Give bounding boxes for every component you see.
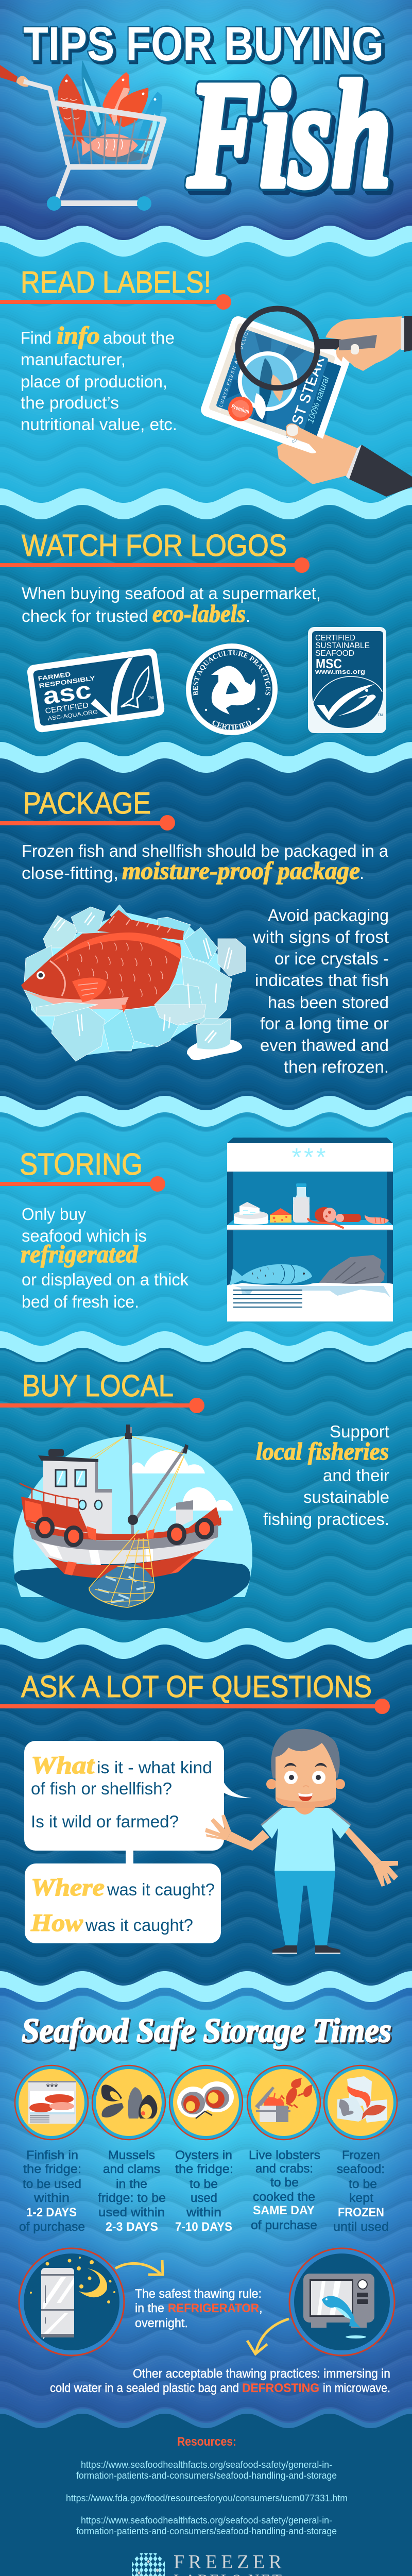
- column: lobsters: of purchase: [251, 2218, 317, 2232]
- pink fish: [81, 134, 138, 157]
- column: finfish: 1-2 DAYS: [26, 2206, 77, 2219]
- column: mussels: [98, 2148, 166, 2234]
- logo: msc: TM: [377, 714, 383, 717]
- column: mussels: used within: [98, 2206, 165, 2219]
- speech bubble: where and how: was it caught?: [85, 1916, 193, 1935]
- icon: shopping cart with fish: [0, 60, 164, 211]
- column: oysters: to be: [190, 2177, 218, 2191]
- icon: mussels: [101, 2084, 157, 2119]
- body text: nutritional value, etc.: [21, 415, 177, 434]
- column: lobsters: and crabs:: [255, 2162, 313, 2176]
- body text: the product’s: [21, 393, 119, 412]
- divider waves: [0, 223, 412, 2010]
- column: finfish: the fridge:: [23, 2162, 81, 2176]
- speech bubble: where and how: was it caught?: [107, 1880, 215, 1899]
- arms: [226, 1830, 269, 1851]
- icon: freezer: [28, 2081, 76, 2124]
- bubble connector: [126, 1850, 133, 1865]
- body text: place of production,: [21, 372, 167, 391]
- body text: When buying seafood at a supermarket,: [22, 584, 321, 603]
- blue fish: [230, 1264, 312, 1285]
- column: lobsters: SAME DAY: [253, 2204, 315, 2217]
- column: mussels: fridge: to be: [98, 2191, 166, 2205]
- icon: fridge at night: [19, 2248, 124, 2355]
- white ice bed: [227, 1283, 393, 1321]
- illustration: fridge display: ***: [291, 1144, 329, 1171]
- column: frozen: to be: [349, 2177, 377, 2191]
- column: finfish: of purchase: [19, 2220, 85, 2234]
- column: oysters: used: [191, 2191, 217, 2205]
- body text: fishing practices.: [263, 1510, 389, 1529]
- column: oysters: [175, 2148, 233, 2234]
- panel: storing: [0, 1138, 393, 1321]
- title: seafood safe storage times: Seafood Safe Storage Times: [23, 2013, 393, 2051]
- body text: close-fitting,: [22, 863, 118, 883]
- column: lobsters: to be: [270, 2176, 299, 2190]
- logo: asc: CERTIFIED: [45, 701, 89, 716]
- illustration: hands, label and magnifier: JUST STEAK: [282, 353, 328, 445]
- heading rule: [0, 294, 231, 310]
- label stripes: [233, 1290, 302, 1308]
- column: oysters: 7-10 DAYS: [175, 2220, 232, 2234]
- logo: msc: SUSTAINABLE: [315, 641, 370, 650]
- speech bubble: where and how: How: [30, 1909, 83, 1937]
- body text: eco-labels: [152, 600, 246, 628]
- column: lobsters: cooked the: [253, 2190, 315, 2204]
- logo: msc: [308, 627, 386, 733]
- speech bubble: what: Is it wild or farmed?: [31, 1812, 179, 1831]
- gray fish on ice: [318, 1255, 385, 1284]
- railing: [20, 1483, 79, 1510]
- resource links: https://www.fda.gov/food/resourcesforyou/consumers/ucm077331.htm: [66, 2493, 348, 2503]
- body text: right column: for a long time or: [260, 1014, 389, 1033]
- logo: asc: FARMED: [38, 671, 72, 682]
- column: finfish: Finfish in: [26, 2148, 78, 2162]
- body text: right column: indicates that fish: [255, 971, 389, 990]
- heading: watch for logos: WATCH FOR LOGOS: [22, 529, 287, 563]
- logo: best aquaculture practices: CERTIFIED: [212, 720, 251, 730]
- heading: resources: Resources:: [177, 2435, 236, 2449]
- icon: microwave with fish: [289, 2248, 394, 2355]
- shoes: [272, 1945, 340, 1953]
- column: finfish: within: [33, 2191, 70, 2205]
- column: mussels: Mussels: [108, 2148, 155, 2162]
- body text: right column: even thawed and: [260, 1036, 389, 1055]
- icon: pot with lobsters: [255, 2078, 313, 2122]
- text: safest thawing rule: in the: [135, 2301, 164, 2315]
- illustration: hands, label and magnifier: Premium: [231, 403, 250, 415]
- body text: refrigerated: [21, 1241, 139, 1268]
- shrimp: [365, 1215, 389, 1224]
- body text: about the: [103, 328, 175, 347]
- heading: ask a lot of questions: ASK A LOT OF QUESTIONS: [21, 1670, 372, 1704]
- illustration: hands, label and magnifier: [199, 309, 412, 497]
- column: lobsters: [249, 2148, 320, 2232]
- resource links: [66, 2460, 348, 2536]
- text: other thawing practices: DEFROSTING: [242, 2381, 319, 2395]
- panel: ask a lot of questions: [0, 1670, 398, 1954]
- body text: manufacturer,: [21, 350, 126, 369]
- upper hull: [21, 1497, 89, 1533]
- illustration: fridge display: [227, 1138, 393, 1321]
- illustration: hands, label and magnifier: 100% natural: [305, 375, 331, 425]
- small melting ice cube: [187, 1040, 242, 1060]
- heading rule: [0, 557, 310, 573]
- body text: right column: [252, 906, 389, 1076]
- resource links: https://www.seafoodhealthfacts.org/seafood-safety/general-in-: [81, 2515, 332, 2526]
- logo: asc: TM: [148, 695, 154, 701]
- dark water: [14, 1557, 250, 1620]
- logo: asc: ASC-AQUA.ORG: [47, 709, 98, 722]
- logo: best aquaculture practices: BEST AQUACULTURE PRACTICES: [193, 650, 271, 696]
- body text: seafood which is: [22, 1226, 147, 1245]
- column: oysters: within: [186, 2206, 221, 2219]
- text: safest thawing rule: ,: [259, 2301, 263, 2315]
- text: safest thawing rule: REFRIGERATOR: [168, 2301, 259, 2315]
- body text: [22, 841, 389, 885]
- text: other thawing practices: [50, 2367, 390, 2395]
- text: safest thawing rule: [135, 2287, 263, 2330]
- logo: msc: CERTIFIED: [315, 634, 355, 642]
- ice cubes in front: [36, 984, 206, 1061]
- dark fish behind: [93, 147, 149, 162]
- body text: and their: [323, 1466, 389, 1485]
- body text: .: [246, 606, 250, 625]
- body text: [21, 1205, 188, 1311]
- cart frame: [24, 81, 164, 200]
- red fish: [117, 88, 148, 127]
- logo: freezer labels: [132, 2551, 282, 2576]
- body text: sustainable: [303, 1487, 389, 1506]
- stern tower: [176, 1503, 193, 1528]
- speech bubble: what: What: [31, 1752, 95, 1779]
- logo: asc: asc: [41, 676, 93, 709]
- column: frozen: until used: [333, 2220, 389, 2234]
- column: frozen: seafood:: [337, 2162, 385, 2176]
- column: frozen: [333, 2148, 389, 2234]
- column: finfish: to be used: [23, 2177, 81, 2191]
- blue fish: [134, 92, 162, 155]
- trousers: [274, 1871, 335, 1945]
- title: seafood safe storage times: Seafood Safe Storage Times: [22, 2012, 391, 2049]
- milk bottle: [293, 1187, 310, 1223]
- orange salmon: [102, 72, 130, 126]
- body text: or displayed on a thick: [22, 1270, 188, 1289]
- speech bubble: what: [24, 1741, 252, 1851]
- column: oysters: the fridge:: [175, 2162, 233, 2176]
- column: frozen: kept: [349, 2191, 373, 2205]
- body text: Frozen fish and shellfish should be packaged in a: [22, 841, 389, 860]
- column: lobsters: Live lobsters: [249, 2148, 320, 2162]
- red fish: [58, 74, 87, 149]
- body text: check for trusted: [22, 606, 148, 625]
- panel: package: [0, 786, 389, 1076]
- cabin: [43, 1460, 112, 1540]
- logo: msc: MSC: [316, 656, 342, 671]
- body text: [21, 322, 177, 434]
- panel: buy local: [0, 1369, 389, 1675]
- body text: Find: [21, 328, 52, 347]
- logo: asc: RESPONSIBLY: [39, 674, 96, 689]
- body text: Only buy: [22, 1205, 86, 1224]
- body text: info: [57, 322, 100, 349]
- speech bubble: where and how: [25, 1863, 221, 1943]
- logo: msc: SEAFOOD: [315, 649, 354, 658]
- resource links: formation-patients-and-consumers/seafood-handling-and-storage: [76, 2526, 337, 2536]
- illustration: fish on ice: [21, 905, 246, 1061]
- hull bands: [46, 1548, 206, 1579]
- panel: header: [0, 17, 395, 223]
- cart wires: [64, 107, 152, 165]
- column: mussels: in the: [116, 2177, 147, 2191]
- logo: asc: [26, 648, 165, 733]
- panel: seafood safe storage times: [15, 2012, 397, 2395]
- logo: freezer labels: FREEZER: [174, 2551, 282, 2573]
- icon: freezer: ***: [46, 2082, 58, 2093]
- panel: footer: [0, 2409, 412, 2576]
- text: other thawing practices: in microwave.: [323, 2381, 390, 2395]
- text: other thawing practices: Other acceptable thawing practices: immersing in: [133, 2367, 390, 2381]
- icon circle backgrounds: [15, 2065, 397, 2140]
- text: safest thawing rule: The safest thawing rule:: [135, 2287, 262, 2301]
- resource links: formation-patients-and-consumers/seafood-handling-and-storage: [76, 2470, 337, 2481]
- icon: oysters: [177, 2081, 234, 2119]
- heading rule: [0, 815, 175, 831]
- column: mussels: 2-3 DAYS: [106, 2220, 158, 2234]
- blue pike: [81, 60, 105, 139]
- body text: right column: with signs of frost: [252, 927, 389, 946]
- fish: [97, 910, 184, 940]
- mast and boom: [130, 1427, 133, 1548]
- speech bubble: what: is it - what kind: [97, 1758, 212, 1777]
- heading rule: [0, 1176, 165, 1192]
- body text: right column: has been stored: [268, 993, 389, 1012]
- panel: read labels: [0, 265, 412, 497]
- text: other thawing practices: cold water in a sealed plastic bag and: [50, 2381, 239, 2395]
- body text: moisture-proof package: [122, 857, 360, 885]
- heading rule: [0, 1699, 390, 1714]
- heading: storing: STORING: [20, 1147, 143, 1181]
- illustration: fishing boat: [13, 1425, 252, 1675]
- panel: watch for logos: [0, 529, 386, 735]
- body text: Support: [330, 1422, 389, 1441]
- logo: best aquaculture practices: [186, 643, 278, 735]
- icon: frozen seafood in ice: [337, 2076, 387, 2123]
- body text: [22, 584, 321, 628]
- column text: [19, 2148, 389, 2234]
- column: finfish: [19, 2148, 85, 2234]
- heading: package: PACKAGE: [23, 786, 151, 820]
- body text: .: [359, 863, 364, 883]
- heading: buy local: BUY LOCAL: [22, 1369, 174, 1403]
- speech bubble: where and how: Where: [31, 1874, 105, 1901]
- column: oysters: Oysters in: [175, 2148, 232, 2162]
- body text: right column: then refrozen.: [284, 1057, 389, 1076]
- arrow: microwave to text: [247, 2319, 289, 2354]
- shirt: [262, 1808, 350, 1871]
- yellow cheese: [270, 1215, 291, 1223]
- illustration: man: [205, 1729, 398, 1954]
- body text: bed of fresh ice.: [22, 1292, 139, 1311]
- salami and sausages: [315, 1207, 334, 1223]
- column: frozen: FROZEN: [338, 2206, 384, 2219]
- speech bubble: what: of fish or shellfish?: [31, 1779, 172, 1798]
- logo: msc: www.msc.org: [315, 668, 365, 675]
- heading: read labels: READ LABELS!: [21, 265, 211, 299]
- body text: right column: Avoid packaging: [268, 906, 389, 925]
- heading rule: [0, 1398, 204, 1413]
- body text: local fisheries: [256, 1438, 389, 1465]
- text: safest thawing rule: overnight.: [135, 2316, 188, 2330]
- body text: [256, 1422, 389, 1529]
- column: frozen: Frozen: [342, 2148, 380, 2162]
- cheese wheel: [234, 1215, 268, 1223]
- resource links: https://www.seafoodhealthfacts.org/seafood-safety/general-in-: [81, 2460, 332, 2470]
- illustration: hands, label and magnifier: ALWAYS FRESH AND DELICIOUS: [217, 316, 254, 412]
- column: mussels: and clams: [103, 2162, 160, 2176]
- arrow: fridge to text: [115, 2260, 163, 2275]
- net with fish: [89, 1564, 154, 1607]
- body text: right column: or ice crystals -: [274, 949, 389, 968]
- tyres: [37, 1519, 212, 1545]
